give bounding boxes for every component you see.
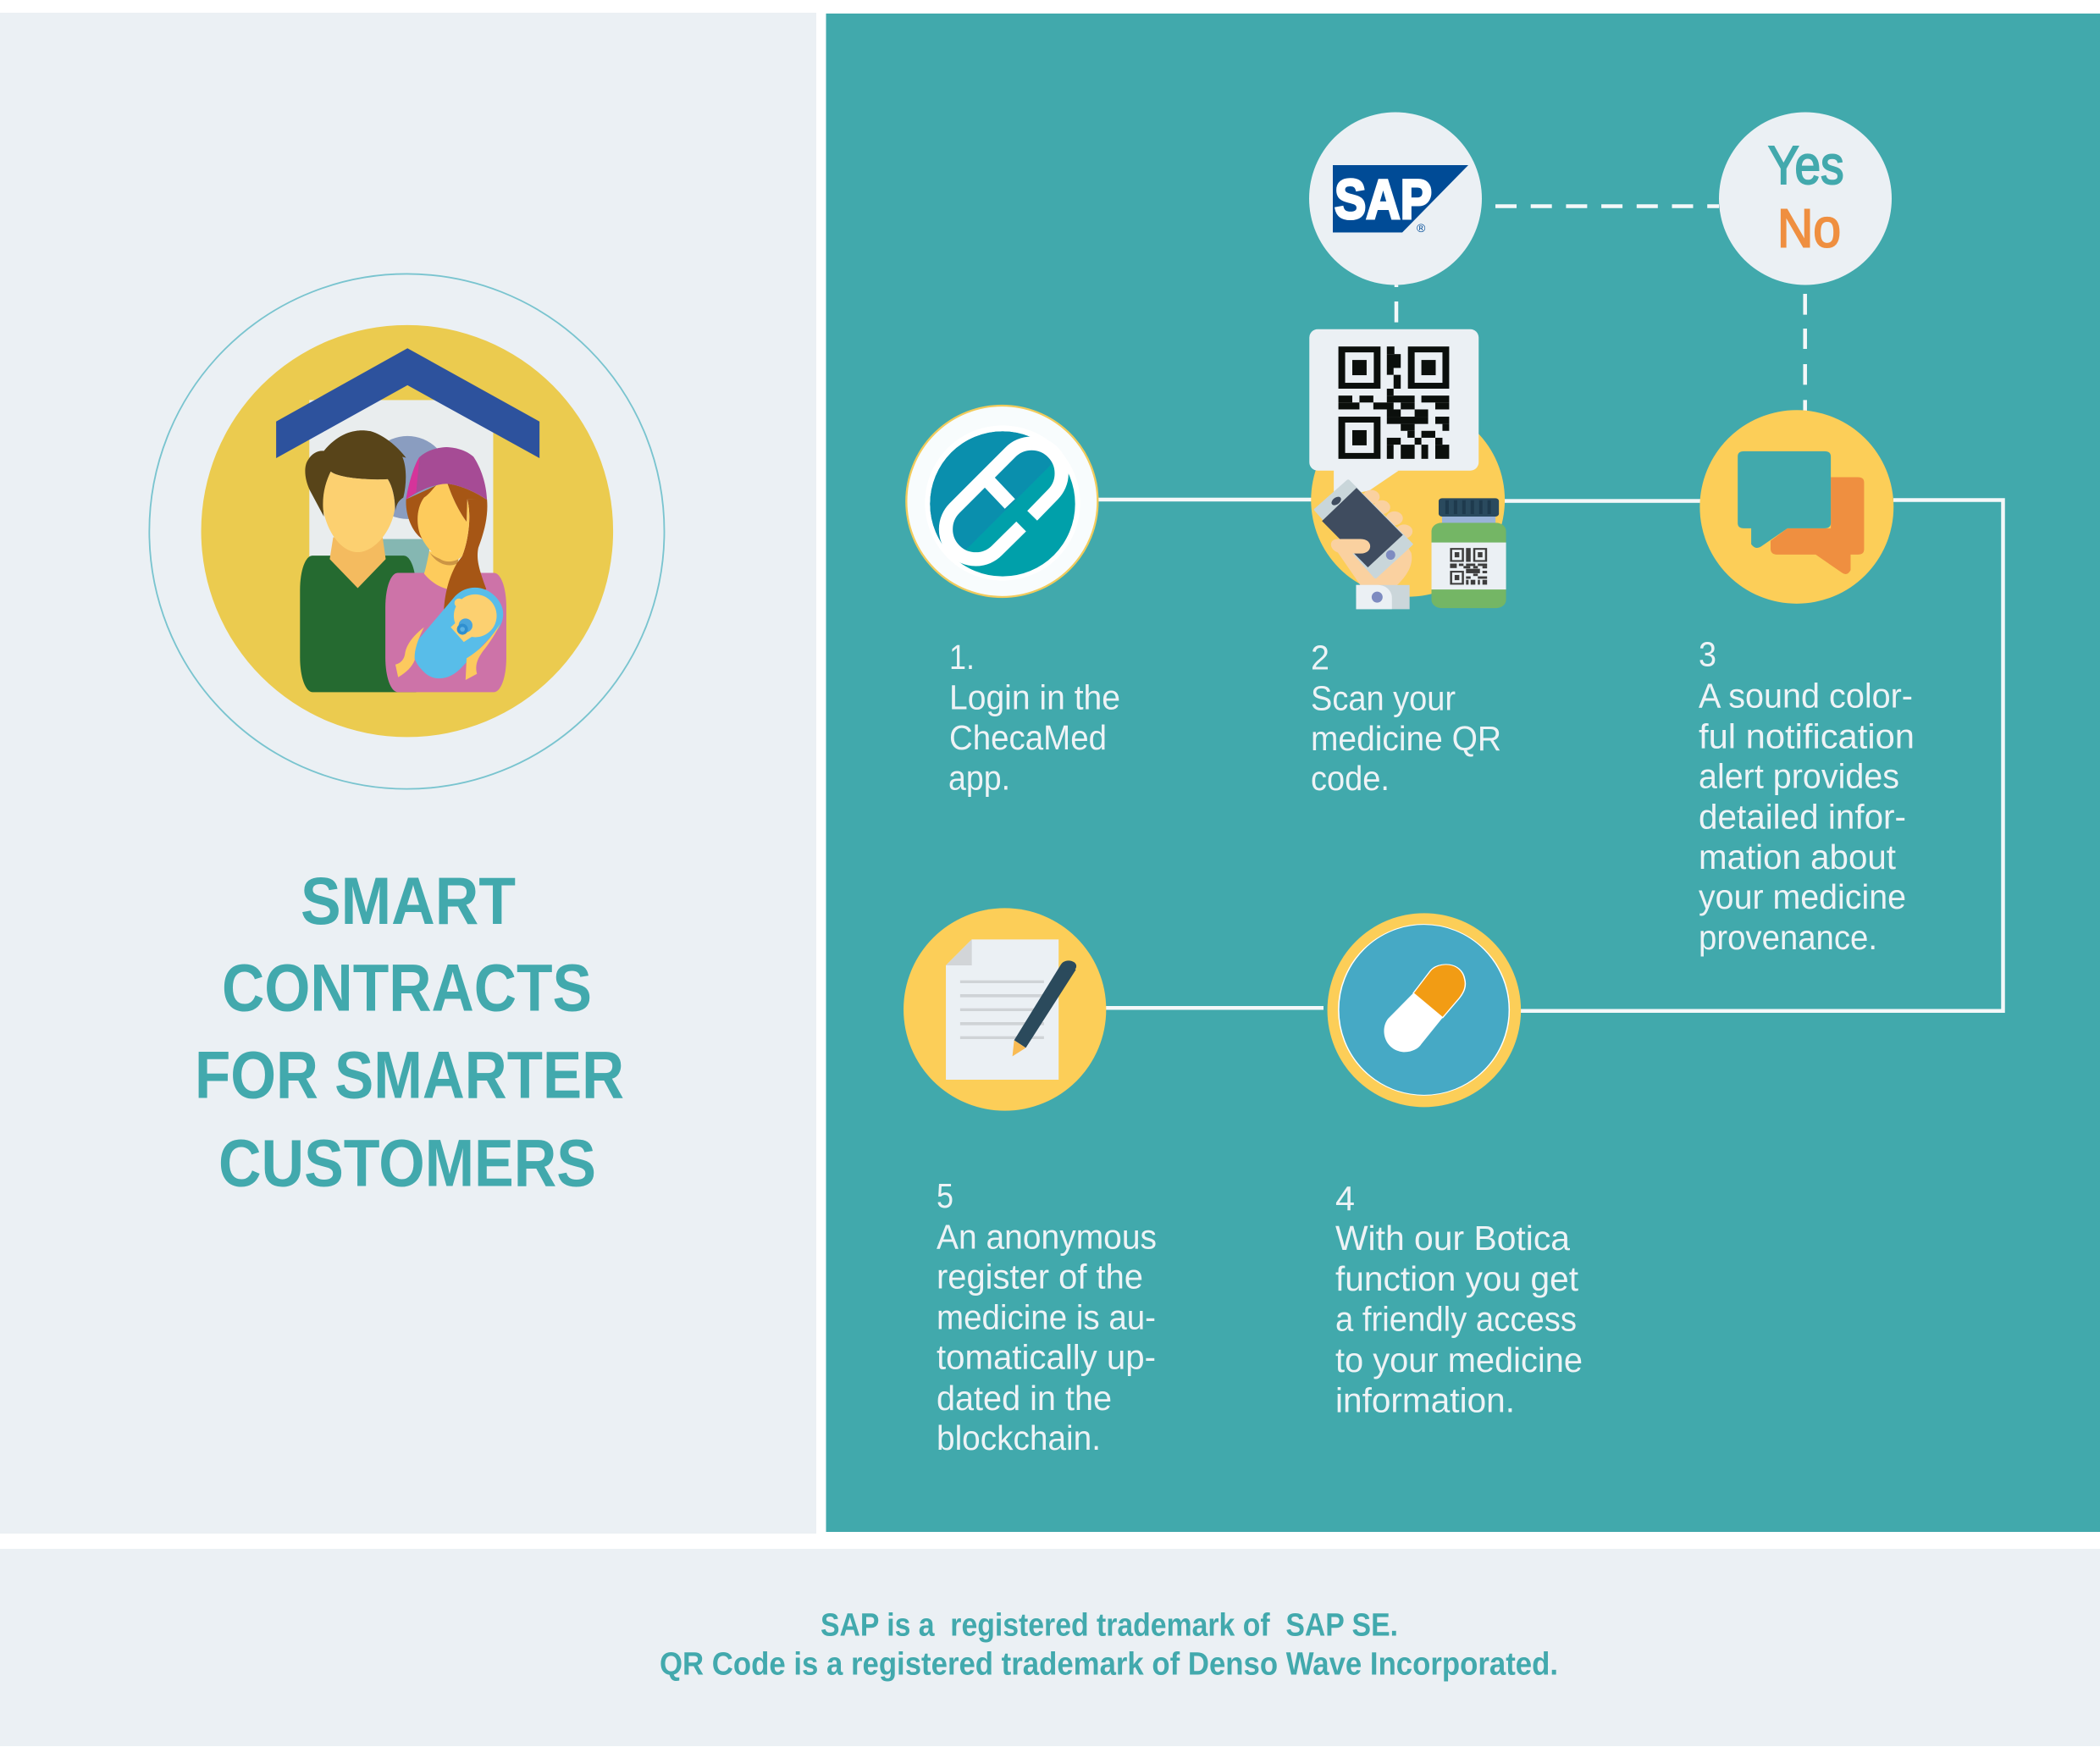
icon: family in house bbox=[149, 274, 664, 789]
text: step 4: a friendly access bbox=[1335, 1300, 1577, 1339]
text: step 5 bbox=[937, 1176, 1157, 1457]
text: step 3 bbox=[1699, 635, 1915, 957]
connector: step 4 to step 5 bbox=[1106, 1006, 1324, 1009]
text: step 4 bbox=[1335, 1179, 1583, 1419]
text: step 1 bbox=[948, 638, 1120, 798]
text: step 4: function you get bbox=[1335, 1259, 1579, 1298]
icon: SAP circle bbox=[1309, 112, 1482, 285]
text: step 1: ChecaMed bbox=[949, 718, 1107, 757]
text: step 5: An anonymous bbox=[937, 1217, 1157, 1256]
connector: dashed SAP to QR bbox=[1395, 285, 1398, 323]
text: step 1: Login in the bbox=[949, 677, 1120, 716]
text: step 5: blockchain. bbox=[937, 1418, 1101, 1457]
text: step 3: ful notification bbox=[1699, 717, 1915, 756]
text: step 1: app. bbox=[948, 759, 1010, 798]
hand holding phone bbox=[1316, 481, 1412, 609]
text: step 3: A sound color- bbox=[1699, 677, 1913, 716]
icon: SAP circle: SAP bbox=[1335, 168, 1432, 230]
icon: step 1 app logo bbox=[906, 406, 1098, 607]
text: step 5: medicine is au- bbox=[937, 1297, 1156, 1336]
connector: dashed SAP to Yes/No bbox=[1495, 204, 1719, 208]
footer trademark note: QR Code is a registered trademark of Denso Wave Incorporated. bbox=[660, 1647, 1558, 1683]
icon: Yes / No circle: Yes bbox=[1768, 135, 1844, 196]
text: step 3: your medicine bbox=[1699, 877, 1906, 916]
medicine bottle bbox=[1432, 498, 1506, 608]
panel: process steps bbox=[826, 14, 2100, 1532]
QR speech bubble bbox=[1309, 329, 1478, 498]
text: step 5: tomatically up- bbox=[937, 1338, 1156, 1377]
title bbox=[195, 863, 624, 1201]
text: step 1: 1. bbox=[949, 638, 975, 677]
text: step 3: alert provides bbox=[1699, 757, 1899, 796]
icon: step 2 circle with phone, QR bubble and bottle bbox=[1309, 329, 1506, 609]
text: step 4: to your medicine bbox=[1335, 1341, 1583, 1379]
icon: SAP circle: ® bbox=[1417, 221, 1426, 235]
text: step 3: 3 bbox=[1699, 635, 1716, 674]
title: CUSTOMERS bbox=[218, 1125, 596, 1201]
text: step 2: Scan your bbox=[1311, 678, 1456, 717]
panel: left intro bbox=[0, 13, 816, 1534]
text: step 4: information. bbox=[1335, 1380, 1515, 1419]
text: step 3: mation about bbox=[1699, 838, 1897, 876]
panel: footer bbox=[0, 1549, 2100, 1746]
title: CONTRACTS bbox=[222, 950, 592, 1026]
icon: step 3 chat bubbles bbox=[1699, 410, 1893, 604]
icon: step 4 capsule bbox=[1328, 913, 1521, 1107]
footer trademark note bbox=[660, 1608, 1558, 1683]
title: SMART bbox=[301, 863, 516, 938]
footer trademark note: SAP is a registered trademark of SAP SE. bbox=[821, 1608, 1398, 1644]
text: step 3: provenance. bbox=[1699, 918, 1877, 957]
connector: step 2 to step 3 bbox=[1502, 499, 1700, 503]
connector: dashed Yes/No to step 3 bbox=[1803, 294, 1807, 411]
text: step 2 bbox=[1311, 639, 1501, 798]
text: step 5: dated in the bbox=[937, 1379, 1112, 1418]
text: step 5: register of the bbox=[937, 1258, 1143, 1296]
text: step 3: detailed infor- bbox=[1699, 797, 1906, 836]
text: step 2: medicine QR bbox=[1311, 719, 1501, 758]
connector: step 3 around to step 4 bbox=[1521, 500, 2003, 1011]
text: step 5: 5 bbox=[937, 1176, 953, 1215]
icon: Yes / No circle: No bbox=[1777, 198, 1841, 259]
text: step 4: 4 bbox=[1335, 1179, 1355, 1218]
icon: step 5 document and pencil bbox=[904, 908, 1106, 1111]
title: FOR SMARTER bbox=[195, 1037, 624, 1113]
text: step 2: code. bbox=[1311, 759, 1390, 798]
connector: step 1 to step 2 bbox=[1097, 498, 1315, 501]
text: step 2: 2 bbox=[1311, 639, 1329, 677]
text: step 4: With our Botica bbox=[1335, 1219, 1570, 1258]
icon: Yes / No circle bbox=[1719, 112, 1892, 285]
